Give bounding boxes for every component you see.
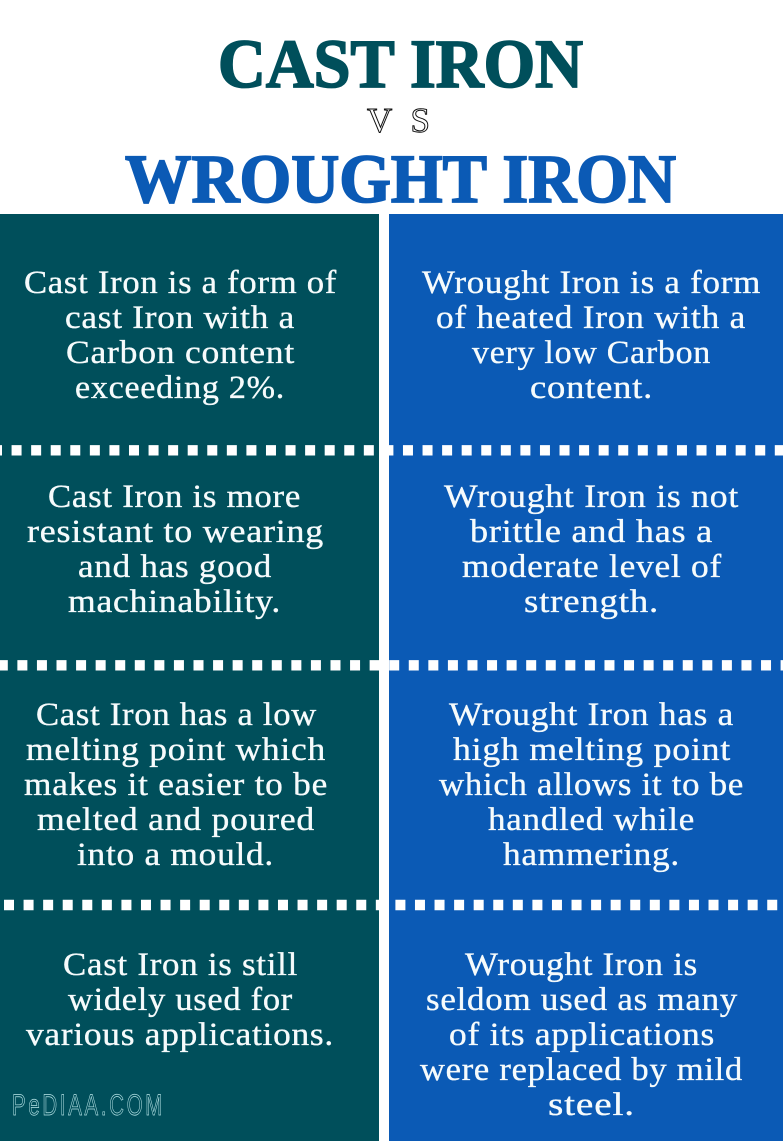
text: cast iron usage: various applications. [26,1017,334,1053]
divider: row 3 [4,900,783,910]
text: cast iron properties: machinability. [68,584,281,620]
text: wrought iron usage [420,947,743,1123]
text: wrought iron properties: Wrought Iron is not [444,479,739,515]
text: wrought iron definition: Wrought Iron is a form [422,265,761,301]
text: cast iron properties: Cast Iron is more [48,479,301,515]
text: cast iron melting point: melting point which [26,732,326,768]
text: wrought iron properties: strength. [524,584,659,620]
text: cast iron melting point: into a mould. [77,837,274,873]
text: wrought iron usage: were replaced by mild [420,1052,743,1088]
text: wrought iron melting point: hammering. [503,837,680,873]
text: wrought iron melting point: handled while [488,802,695,838]
panel: cast iron column [0,214,379,1141]
text: cast iron melting point: makes it easier to be [24,767,328,803]
text: wrought iron usage: seldom used as many [426,982,738,1018]
text: wrought iron definition: of heated Iron with a [436,300,746,336]
text: wrought iron melting point: high melting point [453,732,731,768]
text: wrought iron definition: very low Carbon [472,335,711,371]
text: cast iron properties: resistant to wearing [27,514,324,550]
text: wrought iron usage: Wrought Iron is [465,947,698,983]
text: cast iron melting point: melted and poured [37,802,315,838]
title: wrought iron: WROUGHT IRON [125,141,676,217]
text: wrought iron definition: content. [530,370,653,406]
text: cast iron usage: Cast Iron is still [63,947,298,983]
panel: wrought iron column [389,214,783,1141]
text: cast iron properties: and has good [78,549,272,585]
text: wrought iron definition [422,265,761,406]
text: cast iron usage [26,947,334,1053]
text: wrought iron properties [444,479,739,620]
text: cast iron properties [27,479,324,620]
title: cast iron: CAST IRON [218,26,583,102]
text: cast iron definition: cast Iron with a [65,300,295,336]
text: cast iron melting point: Cast Iron has a low [36,697,317,733]
divider: row 1 [0,445,783,455]
logo: pediaa.com: PeDIAA.COM [12,1089,165,1122]
text: cast iron definition: exceeding 2%. [75,370,285,406]
text: wrought iron properties: moderate level of [462,549,722,585]
text: wrought iron melting point: which allows it to be [439,767,744,803]
divider: row 2 [0,660,783,670]
text: cast iron usage: widely used for [68,982,293,1018]
title: vs: VS [367,101,430,140]
text: cast iron definition: Carbon content [66,335,295,371]
text: wrought iron usage: of its applications [449,1017,715,1053]
text: wrought iron properties: brittle and has a [470,514,713,550]
text: wrought iron melting point: Wrought Iron has a [449,697,734,733]
text: cast iron definition: Cast Iron is a form of [24,265,337,301]
text: wrought iron melting point [439,697,744,873]
text: cast iron melting point [24,697,328,873]
text: wrought iron usage: steel. [548,1087,635,1123]
text: cast iron definition [24,265,337,406]
